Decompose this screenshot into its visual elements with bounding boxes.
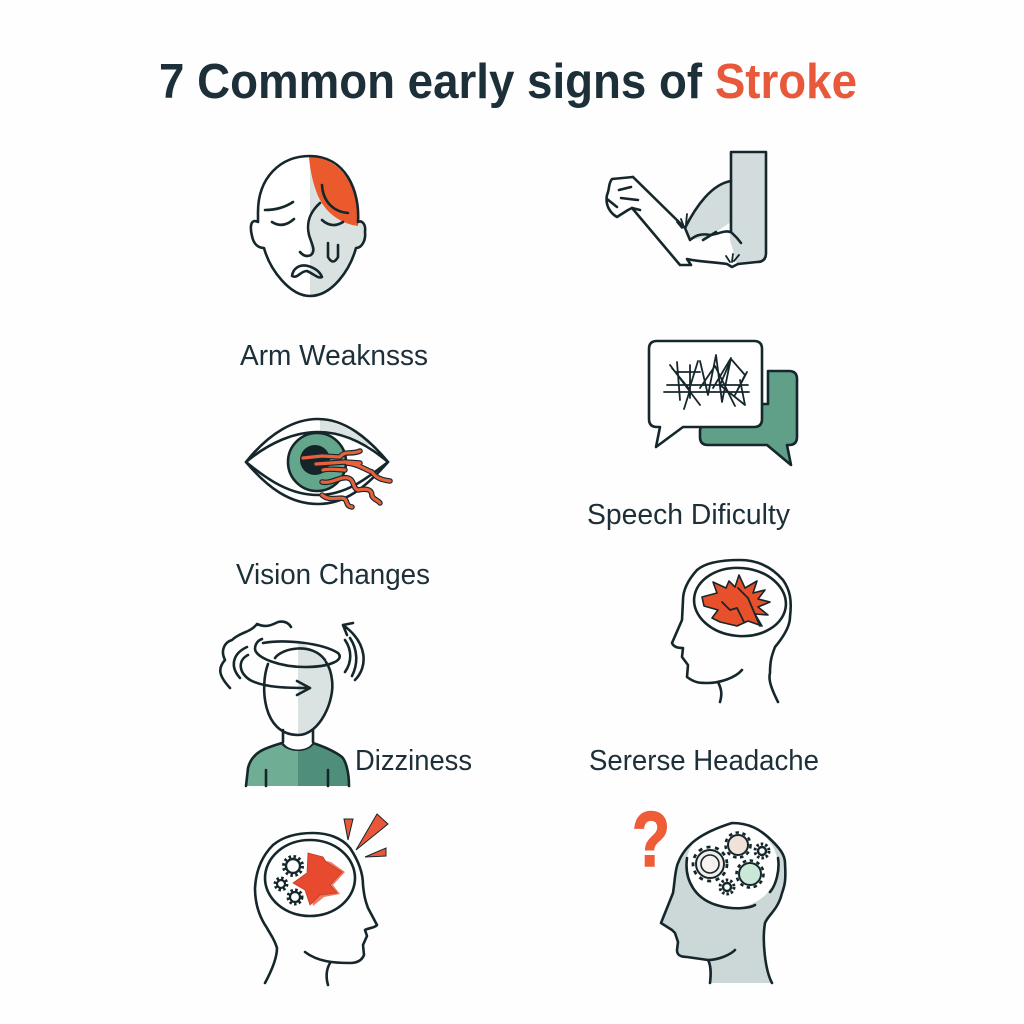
- icon: dizziness figure: [220, 622, 364, 786]
- icon: question mark and gears head: [632, 795, 785, 983]
- label: dizziness: Dizziness: [355, 745, 472, 777]
- label: speech difficulty: Speech Dificulty: [587, 499, 790, 531]
- label: vision changes: Vision Changes: [236, 559, 430, 591]
- icon: severe headache: [672, 560, 791, 702]
- icon: question mark and gears head: ?: [632, 795, 670, 883]
- icon: arm weakness: [607, 152, 766, 267]
- title: 7 Common early signs of Stroke: [159, 55, 857, 109]
- icon: speech bubbles: [649, 341, 797, 465]
- icon: eye with blurred vision: [246, 419, 390, 507]
- icon: drooping face: [251, 156, 365, 296]
- icon: confusion head with star: [255, 814, 388, 985]
- label: severe headache: Sererse Headache: [589, 745, 819, 777]
- label: arm weakness: Arm Weaknsss: [240, 340, 428, 372]
